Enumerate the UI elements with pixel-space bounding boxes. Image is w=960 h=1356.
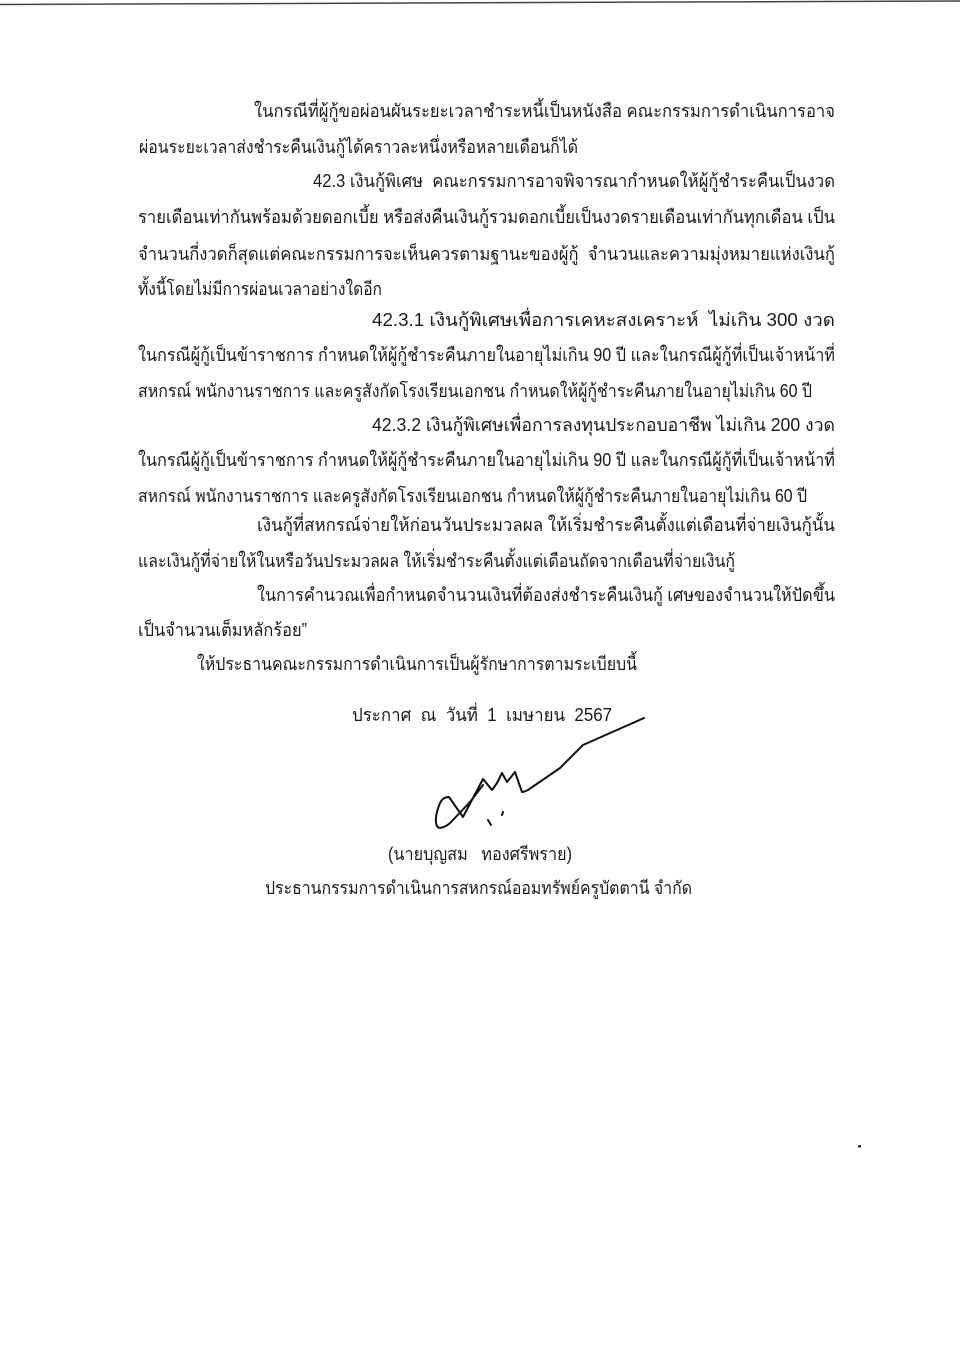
text block: clause 42.3: รายเดือนเท่ากันพร้อมด้วยดอกเบี้ย หรือส่งคืนเงินกู้รวมดอกเบี้ยเป็นงวดรายเดือนเท่ากันทุกเดือน เป็น bbox=[138, 204, 835, 228]
text block: enforcement sentence: ให้ประธานคณะกรรมการดำเนินการเป็นผู้รักษาการตามระเบียบนี้ bbox=[197, 651, 637, 675]
text block: clause 42.3.1: ในกรณีผู้กู้เป็นข้าราชการ กำหนดให้ผู้กู้ชำระคืนภายในอายุไม่เกิน 90 ปี และในกรณีผู้กู้ที่เป็นเจ้าหน้าที่ bbox=[138, 342, 835, 366]
text block: clause 42.3: จำนวนกี่งวดก็สุดแต่คณะกรรมการจะเห็นควรตามฐานะของผู้กู้ จำนวนและความมุ่งหมายแห่งเงินกู้ bbox=[138, 241, 835, 265]
text block: clause 42.3.1: สหกรณ์ พนักงานราชการ และครูสังกัดโรงเรียนเอกชน กำหนดให้ผู้กู้ชำระคืนภายในอายุไม่เกิน 60 ปี bbox=[138, 380, 812, 402]
text block: clause 42.3.2: 42.3.2 เงินกู้พิเศษเพื่อการลงทุนประกอบอาชีพ ไม่เกิน 200 งวด bbox=[372, 412, 835, 436]
signatory name: (นายบุญสม ทองศรีพราย) bbox=[388, 844, 572, 865]
date line: ประกาศ ณ วันที่ 1 เมษายน 2567 bbox=[352, 702, 612, 725]
text block: deferment paragraph: ในกรณีที่ผู้กู้ขอผ่อนผันระยะเวลาชำระหนี้เป็นหนังสือ คณะกรรมการดำเนินการอาจ bbox=[254, 98, 835, 122]
text block: clause 42.3.2 bbox=[138, 412, 835, 507]
text block: repayment start: เงินกู้ที่สหกรณ์จ่ายให้ก่อนวันประมวลผล ให้เริ่มชำระคืนตั้งแต่เดือนที่จ่ายเงินกู้นั้น bbox=[257, 512, 835, 536]
text block: clause 42.3 bbox=[138, 169, 835, 299]
signature bbox=[436, 718, 644, 828]
text block: rounding rule bbox=[138, 582, 835, 640]
text block: repayment start: และเงินกู้ที่จ่ายให้ในหรือวันประมวลผล ให้เริ่มชำระคืนตั้งแต่เดือนถัดจากเดือนที่จ่ายเงินกู้ bbox=[138, 548, 735, 572]
text block: rounding rule: ในการคำนวณเพื่อกำหนดจำนวนเงินที่ต้องส่งชำระคืนเงินกู้ เศษของจำนวนให้ปัดขึ้น bbox=[257, 582, 835, 606]
text block: clause 42.3.1: 42.3.1 เงินกู้พิเศษเพื่อการเคหะสงเคราะห์ ไม่เกิน 300 งวด bbox=[372, 307, 835, 331]
text block: deferment paragraph bbox=[139, 98, 835, 158]
text block: clause 42.3: 42.3 เงินกู้พิเศษ คณะกรรมการอาจพิจารณากำหนดให้ผู้กู้ชำระคืนเป็นงวด bbox=[313, 169, 835, 192]
text block: clause 42.3.1 bbox=[138, 307, 835, 402]
text block: deferment paragraph: ผ่อนระยะเวลาส่งชำระคืนเงินกู้ได้คราวละหนึ่งหรือหลายเดือนก็ได้ bbox=[139, 134, 578, 158]
signatory title: ประธานกรรมการดำเนินการสหกรณ์ออมทรัพย์ครูบัตตานี จำกัด bbox=[265, 878, 692, 899]
text block: clause 42.3.2: ในกรณีผู้กู้เป็นข้าราชการ กำหนดให้ผู้กู้ชำระคืนภายในอายุไม่เกิน 90 ปี และในกรณีผู้กู้ที่เป็นเจ้าหน้าที่ bbox=[138, 447, 835, 471]
text block: clause 42.3: ทั้งนี้โดยไม่มีการผ่อนเวลาอย่างใดอีก bbox=[138, 276, 382, 299]
text block: repayment start bbox=[138, 512, 835, 572]
text block: clause 42.3.2: สหกรณ์ พนักงานราชการ และครูสังกัดโรงเรียนเอกชน กำหนดให้ผู้กู้ชำระคืนภายในอายุไม่เกิน 60 ปี bbox=[138, 485, 807, 507]
text block: rounding rule: เป็นจำนวนเต็มหลักร้อย” bbox=[138, 618, 307, 640]
